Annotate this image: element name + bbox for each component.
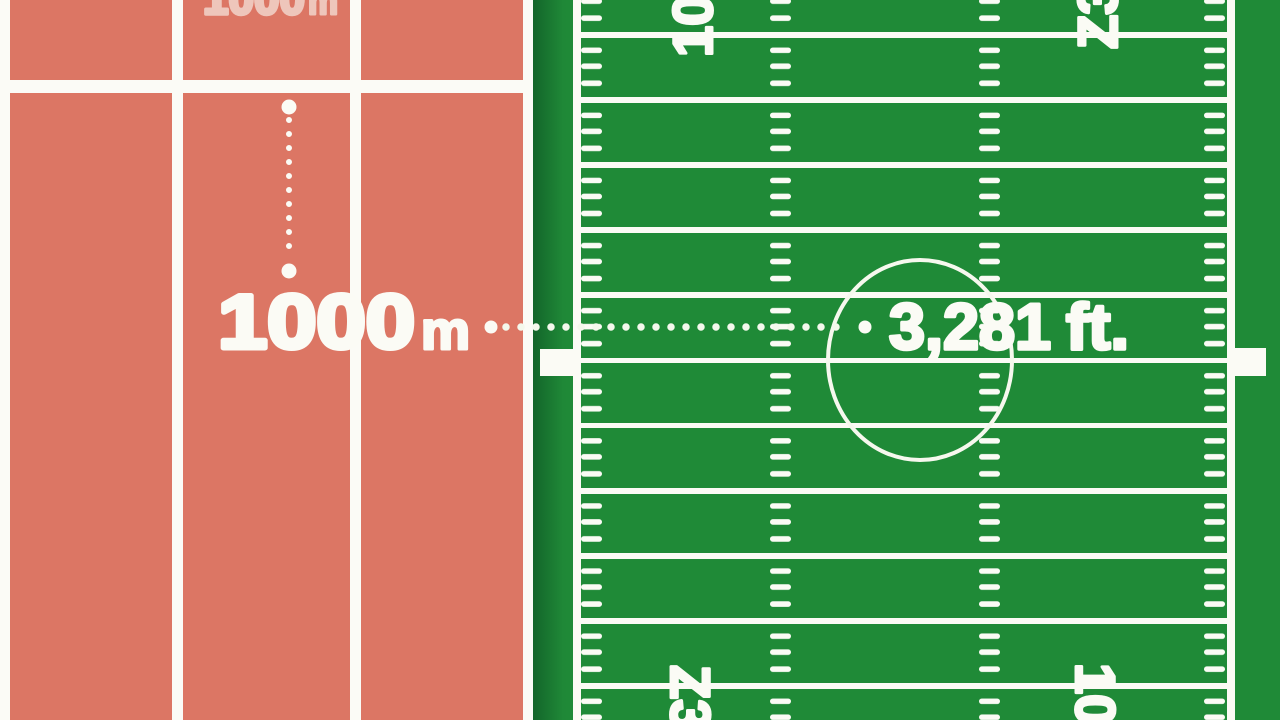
panel: football field [533, 0, 1280, 720]
dotted line [506, 323, 851, 331]
unit: ft. [1066, 290, 1129, 363]
left goal post stub [540, 349, 573, 376]
left dot [484, 320, 498, 334]
right goal post stub [1235, 348, 1266, 376]
left sideline [573, 0, 581, 720]
left sideline shadow band [533, 0, 573, 720]
lane 1 upper [10, 0, 172, 80]
top dot [282, 100, 296, 114]
right dot [858, 320, 872, 334]
right sideline [1227, 0, 1235, 720]
lane 2 upper [183, 0, 350, 80]
lane 1 lower [10, 93, 172, 720]
metric label: 1000m [218, 280, 470, 365]
horizontal dotted connector [484, 320, 872, 334]
track background lines [0, 0, 533, 720]
number: 1000 [218, 280, 415, 365]
center circle [828, 260, 1012, 460]
lane 2 lower [183, 93, 350, 720]
turf [533, 0, 1280, 720]
lane 3 upper [361, 0, 523, 80]
dotted line [286, 120, 292, 260]
hash marks [581, 0, 1225, 720]
bottom dot [282, 264, 296, 278]
imperial label: 3,281 ft. [889, 290, 1129, 363]
vertical dotted connector [282, 100, 296, 278]
panel: running track [0, 0, 533, 720]
number: 3,281 [889, 290, 1051, 363]
unit: m [421, 301, 470, 361]
lane 3 lower [361, 93, 523, 720]
yard lines [581, 32, 1227, 689]
